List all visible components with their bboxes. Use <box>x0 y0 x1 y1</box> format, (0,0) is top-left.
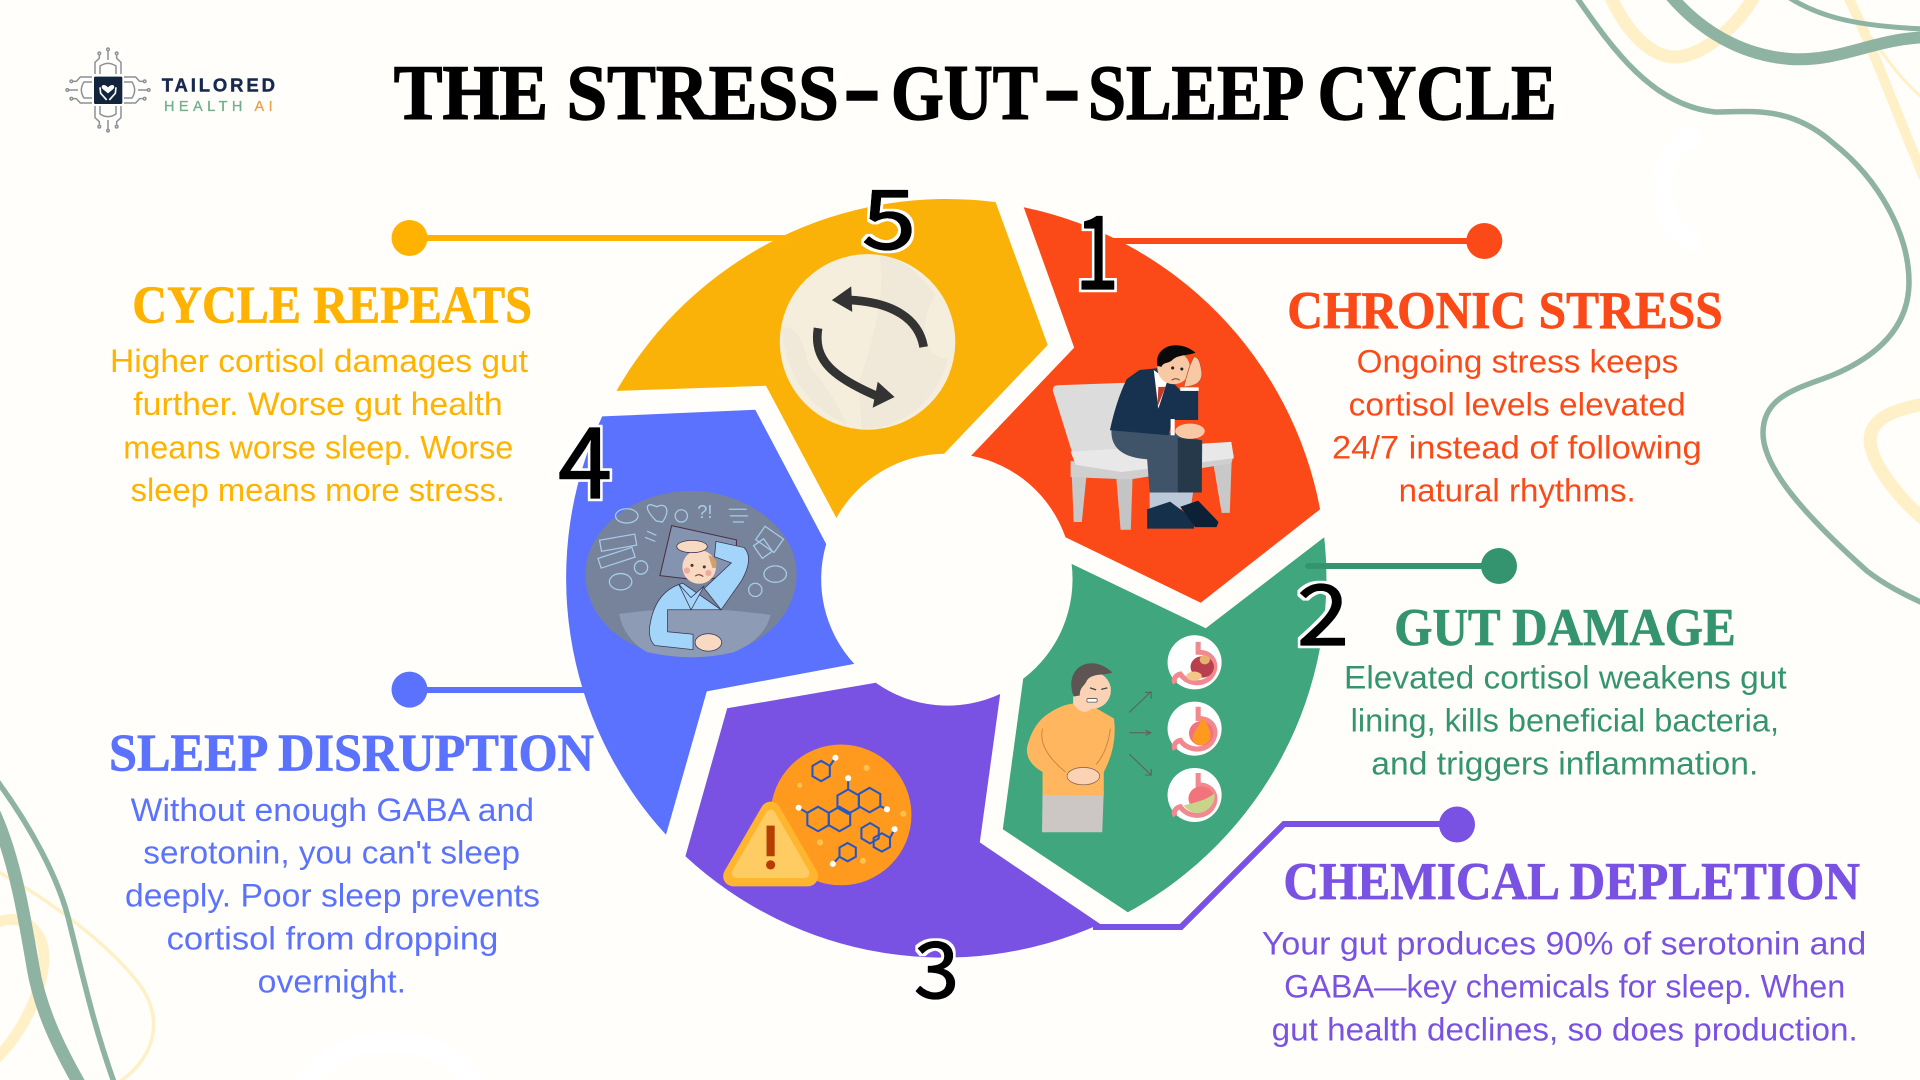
body <box>1344 659 1787 781</box>
body: gut health declines, so does production. <box>1272 1012 1858 1048</box>
icon: molecules and warning sign <box>733 744 911 885</box>
segment 3: chemical depletion <box>685 683 1100 958</box>
heading: CHRONIC STRESS <box>1287 282 1723 340</box>
body: Higher cortisol damages gut <box>110 343 528 379</box>
segment 5: cycle repeats <box>616 199 1048 518</box>
heading: GUT DAMAGE <box>1394 599 1736 657</box>
body <box>125 792 540 999</box>
heading: SLEEP DISRUPTION <box>109 725 594 783</box>
body: Without enough GABA and <box>131 792 534 828</box>
connector: sleep disruption <box>392 672 590 708</box>
connector: cycle repeats <box>392 220 790 256</box>
heading: CHEMICAL DEPLETION <box>1283 853 1860 911</box>
step number 5: 5 <box>862 154 916 273</box>
heading: CYCLE REPEATS <box>132 277 532 335</box>
body: Elevated cortisol weakens gut <box>1344 659 1787 695</box>
body: cortisol levels elevated <box>1349 386 1686 422</box>
text block: chronic stress <box>1287 282 1723 508</box>
body: deeply. Poor sleep prevents <box>125 878 540 914</box>
icon: cycle arrows <box>780 254 955 430</box>
title <box>394 44 1557 136</box>
title: THE STRESS <box>394 49 839 136</box>
brand sub-name: HEALTH AI <box>164 99 273 115</box>
step number 2: 2 <box>1297 549 1349 670</box>
body: and triggers inflammation. <box>1371 745 1758 781</box>
icon: circuit heart <box>66 48 150 132</box>
body: Your gut produces 90% of serotonin and <box>1262 925 1866 961</box>
title: SLEEP CYCLE <box>1088 49 1557 136</box>
body: further. Worse gut health <box>133 386 503 422</box>
icon: stomach with fire <box>1168 702 1222 756</box>
illustrations placed in ring coordinates <box>585 254 1234 885</box>
body: 24/7 instead of following <box>1332 429 1702 465</box>
segment 4: sleep disruption <box>566 410 854 835</box>
body: serotonin, you can't sleep <box>143 835 520 871</box>
body <box>1332 344 1702 508</box>
connector: chemical depletion <box>1093 806 1475 927</box>
icon: stomach with food <box>1168 635 1222 689</box>
body: sleep means more stress. <box>131 472 505 508</box>
body: GABA—key chemicals for sleep. When <box>1284 968 1845 1004</box>
body: natural rhythms. <box>1399 472 1636 508</box>
title: GUT <box>891 49 1038 136</box>
body <box>110 343 528 508</box>
step number 4: 4 <box>558 385 612 527</box>
icon: man with stomach pain <box>1027 635 1222 832</box>
text block: gut damage <box>1344 599 1787 781</box>
icon: stomach with acid <box>1168 768 1222 822</box>
body: Ongoing stress keeps <box>1357 344 1678 380</box>
body: lining, kills beneficial bacteria, <box>1351 702 1779 738</box>
body <box>1262 925 1866 1048</box>
connector: chronic stress <box>1108 223 1502 259</box>
text block: cycle repeats <box>110 277 532 508</box>
step number 1: 1 <box>1075 172 1119 319</box>
step number 3: 3 <box>914 909 959 1021</box>
text block: sleep disruption <box>109 725 594 999</box>
logo: Tailored Health AI <box>66 48 275 132</box>
segment 1: chronic stress <box>971 207 1320 603</box>
icon: sleepless man <box>585 491 797 657</box>
body: means worse sleep. Worse <box>123 429 513 465</box>
title: - <box>1045 44 1079 131</box>
body: cortisol from dropping <box>167 920 498 956</box>
text block: chemical depletion <box>1262 853 1866 1048</box>
icon: sleepless man: ?! <box>697 501 712 522</box>
icon: stressed man on chair <box>1053 345 1234 530</box>
segment 2: gut damage <box>1003 537 1326 912</box>
brand name: TAILORED <box>162 75 275 96</box>
connector: gut damage <box>1308 548 1517 584</box>
body: overnight. <box>258 963 406 999</box>
cycle ring <box>566 199 1326 958</box>
title: - <box>845 44 879 131</box>
